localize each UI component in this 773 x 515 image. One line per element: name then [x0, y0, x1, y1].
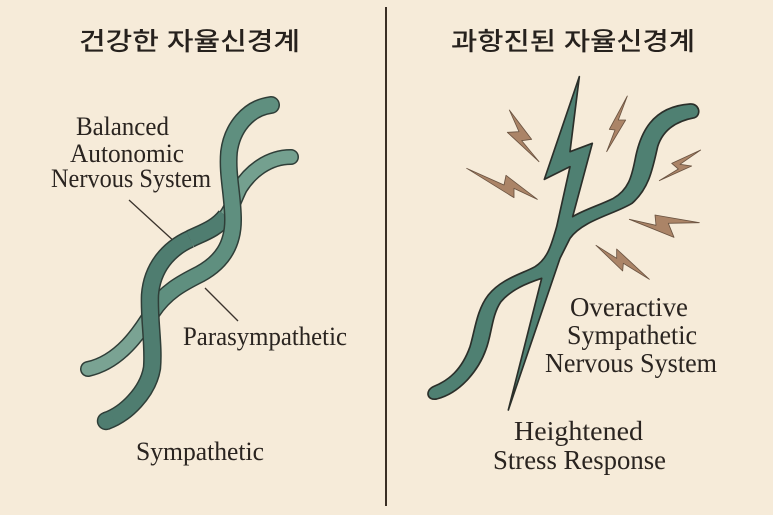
strand: upper light part, behind	[226, 157, 291, 216]
label: Overactive Sympathetic Nervous System	[545, 292, 717, 378]
label: Overactive Sympathetic Nervous System: Overactive	[570, 292, 688, 322]
panel: overactive nerve diagram	[428, 77, 701, 410]
label: Heightened Stress Response: Heightened	[514, 416, 644, 446]
bolt 2	[467, 168, 537, 199]
label: Parasympathetic: Parasympathetic	[183, 322, 347, 351]
bolt 4	[659, 150, 701, 181]
label: Heightened Stress Response: Stress Response	[493, 445, 666, 475]
divider between panels	[385, 7, 387, 506]
strand: sympathetic lower part, in front	[97, 239, 190, 430]
bolt 6	[596, 245, 649, 279]
bolt 1	[507, 110, 539, 162]
label: Heightened Stress Response	[493, 416, 666, 475]
label: Balanced Autonomic Nervous System: Autonomic	[70, 139, 184, 168]
label: Overactive Sympathetic Nervous System: Nervous System	[545, 348, 717, 378]
strand: crossing strand from top to lower left	[88, 105, 271, 369]
bolt 3	[607, 96, 627, 152]
label: Overactive Sympathetic Nervous System: Sympathetic	[567, 320, 697, 350]
title: healthy autonomic nervous system: 건강한 자율신경계	[79, 28, 300, 56]
title: overactive autonomic nervous system: 과항진된 자율신경계	[451, 28, 695, 56]
panel: healthy nerves diagram	[88, 105, 291, 430]
label: Balanced Autonomic Nervous System: Nervous System	[51, 164, 211, 193]
label: Balanced Autonomic Nervous System: Balanced	[76, 112, 169, 141]
stress bolts	[467, 96, 701, 279]
strand: dark part beneath the upper crossing	[190, 216, 226, 239]
leader line: balanced	[129, 200, 176, 243]
nerve with lightning shape	[428, 77, 699, 410]
leader line: parasympathetic	[205, 288, 238, 321]
label: Balanced Autonomic Nervous System	[51, 112, 211, 193]
bolt 5	[629, 215, 699, 237]
label: Sympathetic: Sympathetic	[136, 437, 264, 466]
